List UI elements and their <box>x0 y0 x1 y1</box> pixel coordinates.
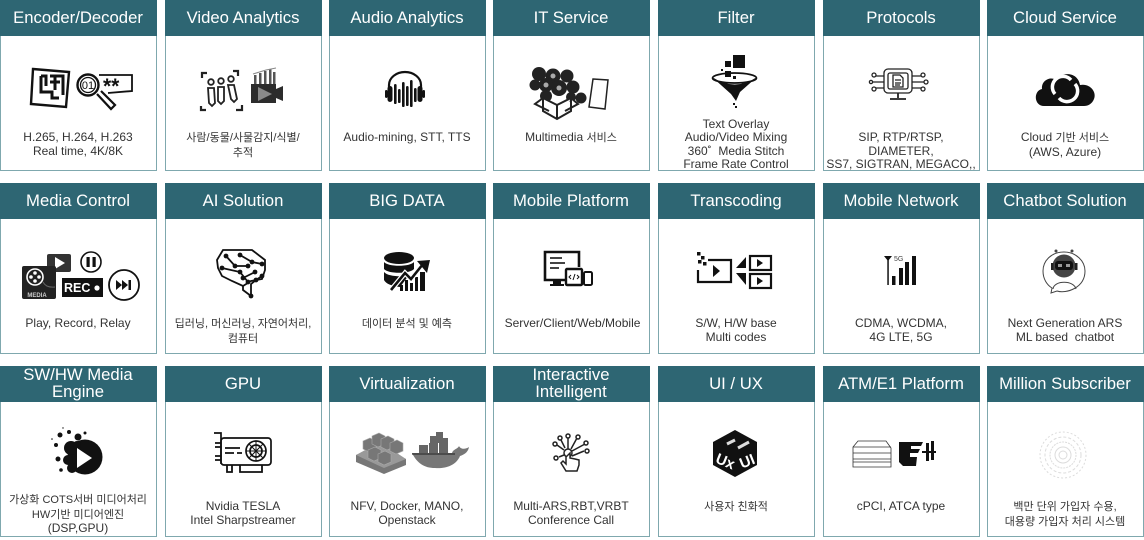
heading: BIG DATA: BIG DATA <box>369 191 445 210</box>
heading: Audio Analytics <box>328 0 486 36</box>
icon: concentric subscriber rings <box>1040 432 1086 478</box>
text: media engine description: (DSP,GPU) <box>48 521 108 535</box>
heading: Interactive Intelligent: Interactive <box>532 365 609 384</box>
icon: play button with bubbles <box>51 427 102 474</box>
heading: Mobile Network <box>822 182 980 218</box>
text: subscriber capacity <box>1005 500 1125 528</box>
panel: AI Solution <box>165 183 322 354</box>
icon: UX UI cube: Ux <box>713 450 737 473</box>
heading: Chatbot Solution: Chatbot Solution <box>1003 191 1127 210</box>
text: video analytics features <box>186 132 300 158</box>
text: mobile network standards: 4G LTE, 5G <box>869 330 933 344</box>
text: codecs <box>23 131 133 158</box>
heading: Filter <box>658 0 814 36</box>
heading: Video Analytics: Video Analytics <box>187 8 299 27</box>
panel: Video Analytics <box>165 0 322 171</box>
icon: codec block and magnifier: ** <box>102 74 120 98</box>
icon: people detection and video camera <box>200 68 283 112</box>
icon: media control buttons <box>22 251 140 301</box>
heading: Encoder/Decoder <box>0 0 156 36</box>
text: interactive services <box>513 500 629 526</box>
icon: protocol monitor <box>868 68 929 100</box>
icon: circuit brain <box>216 249 266 298</box>
icon: chatbot robot <box>1042 250 1086 294</box>
text: subscriber capacity: 대용량 가입자 처리 시스템 <box>1005 516 1125 528</box>
icon: touch with network nodes <box>552 433 590 472</box>
icon: headphones with waveform <box>385 70 425 107</box>
panel: Million Subscriber <box>987 366 1144 537</box>
text: user friendly: 사용자 친화적 <box>704 501 768 513</box>
text: cloud service <box>1021 131 1109 158</box>
heading: Media Control <box>0 182 156 218</box>
text: chatbot features: ML based chatbot <box>1016 330 1114 344</box>
heading: Filter: Filter <box>717 8 755 27</box>
text: AI features: 딥러닝, 머신러닝, 자연어처리, <box>175 318 311 330</box>
text: interactive services: Conference Call <box>528 512 614 526</box>
heading: UI / UX <box>658 366 814 402</box>
text: filter features: Frame Rate Control <box>683 157 789 171</box>
panel: Interactive Intelligent <box>493 366 650 537</box>
text: AI features <box>175 318 311 344</box>
text: virtualization technologies <box>351 500 463 526</box>
heading: Encoder/Decoder: Encoder/Decoder <box>13 8 143 27</box>
icon: 5G signal bars: 5G <box>894 256 903 262</box>
panel: SW/HW Media Engine <box>0 366 157 537</box>
icon: transcoding frames <box>696 252 772 290</box>
heading: Video Analytics <box>164 0 322 36</box>
icon: codec block and magnifier <box>30 68 133 111</box>
icon: server rack and docker whale <box>356 432 469 474</box>
heading: Interactive Intelligent: Intelligent <box>535 382 607 401</box>
icon: service box and phone <box>530 67 609 120</box>
text: filter features: Audio/Video Mixing <box>685 130 787 144</box>
text: big data analytics: 데이터 분석 및 예측 <box>362 318 452 330</box>
text: virtualization technologies: Openstack <box>378 512 436 526</box>
heading: SW/HW Media Engine: Engine <box>52 382 104 401</box>
icon: media control buttons: MEDIA <box>27 292 47 298</box>
heading: Protocols: Protocols <box>866 8 936 27</box>
panel: Transcoding <box>658 183 815 354</box>
text: protocol list: DIAMETER, <box>868 144 934 158</box>
heading: Mobile Platform <box>492 182 650 218</box>
text: transcoding features: Multi codes <box>706 330 766 344</box>
heading: SW/HW Media Engine <box>0 366 156 402</box>
text: video analytics features: 사람/동물/사물감지/식별/ <box>186 132 300 144</box>
text: media engine description: 가상화 COTS서버 미디어처리 <box>9 494 147 506</box>
panel: Encoder/Decoder <box>0 0 157 171</box>
icon: media control buttons: REC <box>64 280 90 294</box>
panel: Cloud Service <box>987 0 1144 171</box>
heading: Virtualization: Virtualization <box>359 374 455 393</box>
icon: multi-device platform <box>544 250 593 286</box>
heading: GPU: GPU <box>225 374 261 393</box>
panel: Audio Analytics <box>329 0 486 171</box>
heading: Protocols <box>822 0 980 36</box>
text: video analytics features: 추적 <box>233 146 253 158</box>
heading: Audio Analytics: Audio Analytics <box>350 8 464 27</box>
text: codecs: Real time, 4K/8K <box>33 144 123 158</box>
panel: Mobile Platform <box>493 183 650 354</box>
heading: Cloud Service: Cloud Service <box>1013 8 1117 27</box>
panel: Filter <box>658 0 815 171</box>
icon: stacked boards and chassis <box>852 440 936 468</box>
heading: IT Service <box>492 0 650 36</box>
heading: GPU <box>164 366 322 402</box>
text: chatbot features <box>1008 317 1122 344</box>
panel: Mobile Network <box>823 183 980 354</box>
heading: Interactive Intelligent <box>492 366 650 402</box>
text: media engine description <box>9 494 147 535</box>
heading: AI Solution <box>164 182 322 218</box>
heading: Transcoding: Transcoding <box>690 191 782 210</box>
heading: UI / UX: UI / UX <box>709 374 763 393</box>
text: GPU products: Intel Sharpstreamer <box>190 512 296 526</box>
panel: UI / UX <box>658 366 815 537</box>
icon: UX UI cube <box>713 430 757 477</box>
heading: SW/HW Media Engine: SW/HW Media <box>23 365 133 384</box>
panel: Chatbot Solution <box>987 183 1144 354</box>
text: cloud service: (AWS, Azure) <box>1029 144 1101 158</box>
heading: Mobile Platform: Mobile Platform <box>513 191 629 210</box>
text: protocol list <box>826 131 976 170</box>
heading: Virtualization <box>328 366 486 402</box>
text: transcoding features <box>695 317 777 344</box>
heading: BIG DATA <box>328 182 486 218</box>
icon: database with rising arrow <box>384 252 430 291</box>
heading: Million Subscriber: Million Subscriber <box>999 374 1131 393</box>
heading: Transcoding <box>658 182 814 218</box>
text: media engine description: HW기반 미디어엔진 <box>32 508 124 520</box>
icon: 5G signal bars <box>884 256 916 285</box>
heading: Media Control: Media Control <box>26 191 130 210</box>
heading: Million Subscriber <box>986 366 1144 402</box>
panel: Protocols <box>823 0 980 171</box>
panel: GPU <box>165 366 322 537</box>
heading: AI Solution: AI Solution <box>203 191 283 210</box>
text: subscriber capacity: 백만 단위 가입자 수용, <box>1013 501 1117 513</box>
text: filter features <box>683 118 789 171</box>
heading: Mobile Network: Mobile Network <box>844 191 958 210</box>
panel: BIG DATA <box>329 183 486 354</box>
text: GPU products <box>190 500 296 526</box>
text: AI features: 컴퓨터 <box>228 332 258 344</box>
panel: IT Service <box>493 0 650 171</box>
icon: graphics card <box>214 432 272 473</box>
heading: ATM/E1 Platform <box>822 366 980 402</box>
text: mobile network standards <box>855 317 947 344</box>
panel: ATM/E1 Platform <box>823 366 980 537</box>
heading: ATM/E1 Platform: ATM/E1 Platform <box>838 374 964 393</box>
icon: UX UI cube: UI <box>737 451 757 472</box>
icon: cloud with sync ring <box>1036 74 1095 106</box>
icon: codec block and magnifier: 01 <box>81 80 94 92</box>
heading: IT Service: IT Service <box>534 8 608 27</box>
text: filter features: 360˚ Media Stitch <box>688 144 784 158</box>
panel: Virtualization <box>329 366 486 537</box>
heading: Chatbot Solution <box>986 182 1144 218</box>
heading: Cloud Service <box>986 0 1144 36</box>
panel: Media Control <box>0 183 157 354</box>
icon: funnel with squares <box>712 55 758 108</box>
